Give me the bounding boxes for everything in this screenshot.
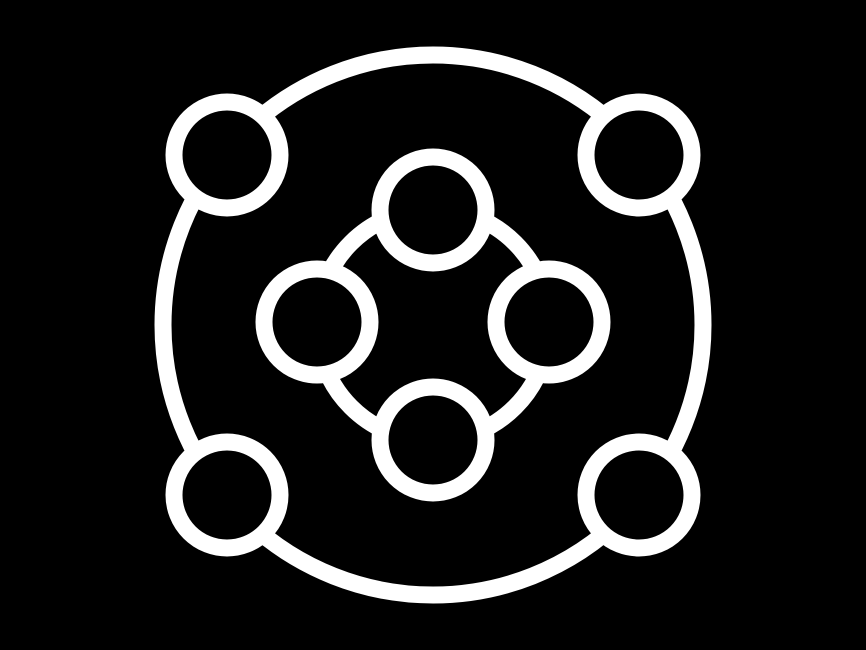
inner node: left [264, 269, 370, 375]
inner node: top [380, 157, 486, 263]
inner node: bottom [380, 387, 486, 493]
inner node: right [496, 269, 602, 375]
corner node: bottom-right [586, 442, 692, 548]
corner node: top-left [174, 102, 280, 208]
inner ring [317, 209, 549, 441]
outer ring [163, 55, 703, 595]
corner node: top-right [586, 102, 692, 208]
corner node: bottom-left [174, 442, 280, 548]
